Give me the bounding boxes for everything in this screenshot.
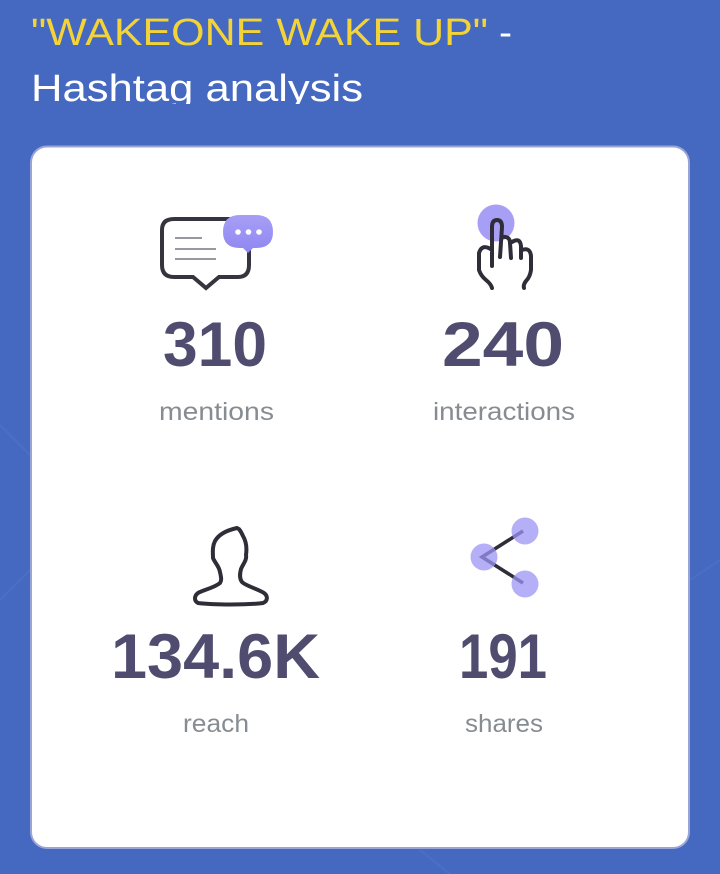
icon: speech bubbles [162,215,273,288]
title [32,18,510,104]
reach label: reach [183,710,249,738]
mentions value: 310 [163,310,267,380]
title: "WAKEONE WAKE UP" [31,12,488,54]
reach value: 134.6K [111,622,320,692]
title: - [499,12,512,54]
interactions label: interactions [433,398,575,426]
interactions value: 240 [442,310,564,380]
title: Hashtag analysis [31,68,363,110]
icon: pointing hand [478,204,531,288]
shares label: shares [465,710,543,738]
icon: person bust [195,528,267,604]
mentions label: mentions [159,398,274,426]
shares value: 191 [459,622,547,692]
panel: metrics card [31,146,689,848]
icon: share [470,518,538,598]
